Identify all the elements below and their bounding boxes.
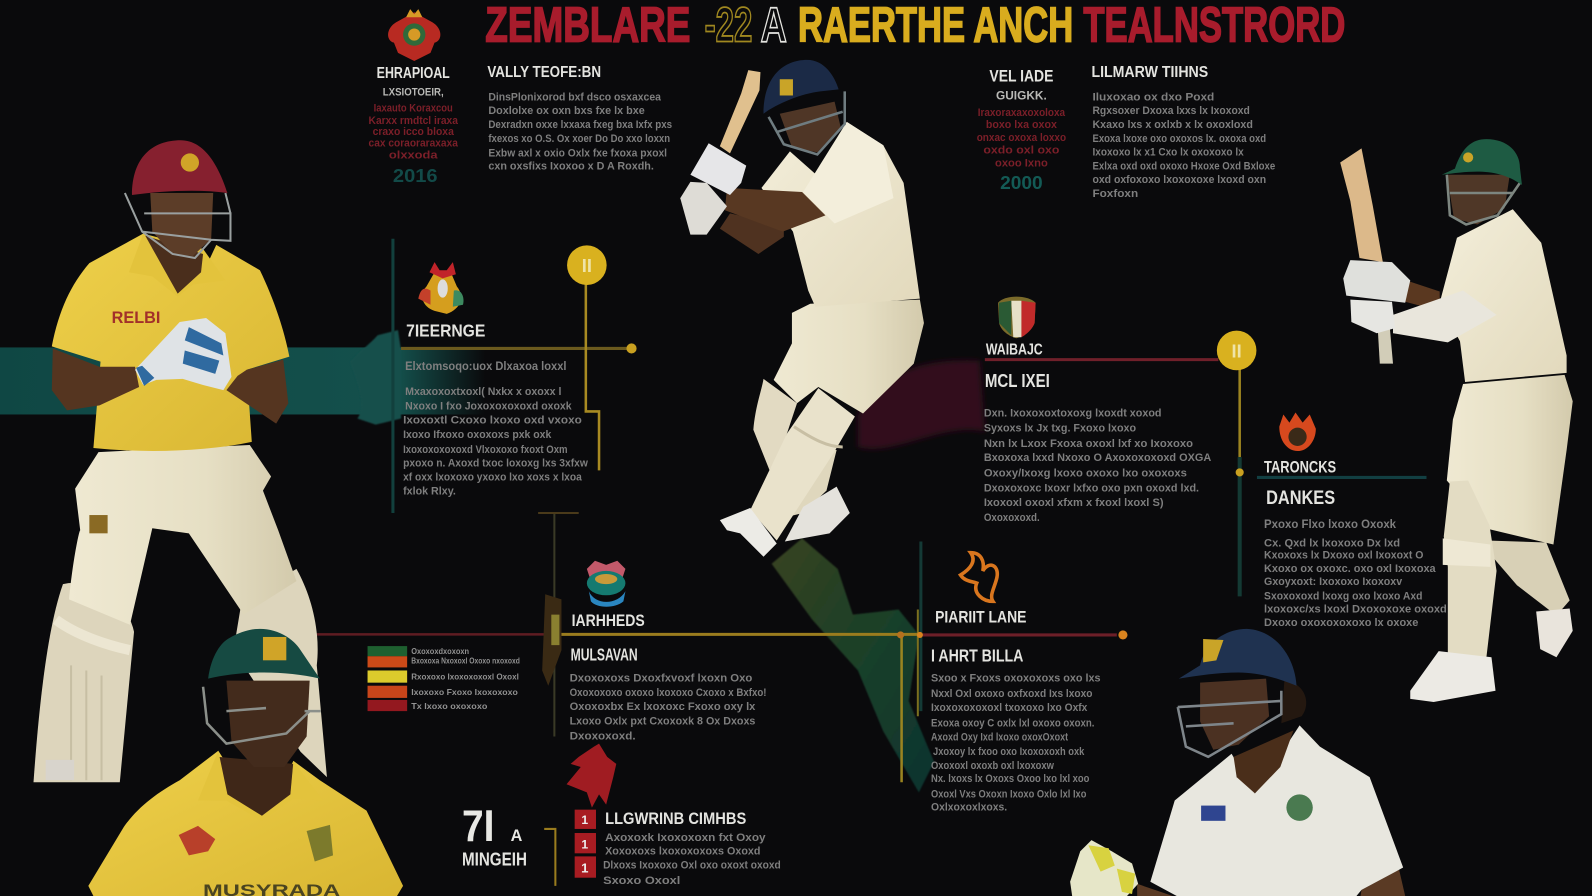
panel: middle left text: Ixoxo Ifxoxo oxoxoxs pxk oxk bbox=[403, 429, 552, 441]
panel: top right summary: onxac oxoxa loxxo bbox=[977, 132, 1067, 144]
long sleeve bbox=[1393, 291, 1497, 342]
panel: bottom small label: MINGEIH bbox=[462, 849, 527, 870]
panel: far right text: Gxoyxoxt: Ixoxoxo Ixoxoxv bbox=[1264, 576, 1403, 588]
shirt bbox=[1150, 725, 1403, 896]
neck bbox=[218, 757, 293, 819]
grille bbox=[203, 687, 321, 744]
panel: far right text: DANKES bbox=[1266, 488, 1335, 509]
panel: top right summary: 2000 bbox=[1000, 172, 1043, 193]
panel: numbered list: Sxoxo Oxoxl bbox=[603, 875, 680, 887]
rear lower leg bbox=[782, 447, 837, 518]
panel: top right text: Exoxa lxoxe oxo oxoxos lx. oxoxa oxd bbox=[1092, 133, 1266, 145]
panel: top left summary: LXSIOTOEIR, bbox=[383, 86, 444, 98]
player: left batter in yellow bbox=[34, 140, 327, 782]
gloves bbox=[690, 143, 746, 195]
icon: red running figure bbox=[567, 744, 616, 808]
rear pad bbox=[1486, 540, 1570, 616]
upper arm bbox=[725, 188, 825, 232]
panel: middle right text: Dxn. Ixoxoxoxtoxoxg lxoxdt xoxod bbox=[984, 408, 1162, 420]
rear shoe bbox=[785, 487, 850, 541]
panel: numbered list: 1 bbox=[581, 861, 588, 876]
panel: bottom right text: Ixoxoxoxoxoxl txoxoxo lxo Oxfx bbox=[931, 702, 1088, 714]
panel: middle left text: fxlok Rlxy. bbox=[403, 486, 456, 498]
sleeve bbox=[803, 122, 893, 223]
panel: bottom right text: Nx. lxoxs lx Oxoxs Oxoo lxo lxl xoo bbox=[931, 773, 1090, 785]
title: RAERTHE ANCH bbox=[798, 0, 1073, 53]
icon: yellow marker right bbox=[1217, 331, 1256, 370]
legend: Bxoxoxa Nxoxoxl Oxoxo nxoxoxd bbox=[411, 656, 520, 665]
connector lines: right bbox=[985, 360, 1244, 596]
panel: middle left text: Elxtomsoqo:uox Dlxaxoa loxxl bbox=[405, 359, 567, 373]
connector lines: bottom bbox=[315, 513, 1127, 782]
badges bbox=[179, 826, 215, 855]
panel: bottom right text: Sxoo x Fxoxs oxoxoxoxs oxo lxs bbox=[931, 673, 1101, 685]
panel: numbered list bbox=[575, 810, 781, 887]
title: A bbox=[760, 0, 787, 53]
panel: middle right text: Ixoxoxl oxoxl xfxm x fxoxl lxoxl S) bbox=[984, 497, 1164, 509]
panel: bottom centre text: Oxoxoxoxo oxoxo lxoxoxo Cxoxo x Bxfxo! bbox=[570, 687, 767, 699]
collar bbox=[198, 751, 323, 821]
panel: numbered list: Dlxoxs Ixoxoxo Oxl oxo oxoxt oxoxd bbox=[603, 860, 781, 872]
panel: top left summary: EHRAPIOAL bbox=[377, 65, 450, 82]
shirt print: RELBI bbox=[112, 309, 160, 327]
panel: top right text: Kxaxo lxs x oxlxb x lx oxoxloxd bbox=[1092, 119, 1253, 131]
face bbox=[1200, 679, 1269, 750]
maroon paint splash bbox=[858, 360, 985, 449]
panel: bottom small label: 7I bbox=[462, 802, 494, 851]
panel: far right text: Cx. Qxd lx lxoxoxo Dx lxd bbox=[1264, 538, 1400, 550]
title: TEALNSTRORD bbox=[1083, 0, 1345, 53]
icon: yellow marker left: II bbox=[582, 255, 592, 276]
panel: far right text: Pxoxo Flxo lxoxo Oxoxk bbox=[1264, 517, 1396, 531]
panel: bottom centre text: Dxoxoxoxd. bbox=[570, 731, 636, 743]
panel: top left text: Dexradxn oxxe lxxaxa fxeg bxa Ixfx pxs bbox=[488, 119, 672, 131]
panel: top right summary: GUIGKK. bbox=[996, 89, 1047, 103]
panel: middle left text: pxoxo n. Axoxd txoc loxoxg lxs 3xfxw bbox=[403, 457, 588, 469]
panel: top right summary: Iraxoraxaxoxoloxa bbox=[978, 107, 1065, 119]
shirt bbox=[761, 122, 920, 307]
grille bbox=[1178, 691, 1281, 757]
icon: middle left crest bbox=[418, 262, 464, 314]
legend: Ixoxoxo Fxoxo Ixoxoxoxo bbox=[411, 688, 518, 697]
panel: bottom centre text bbox=[570, 612, 767, 743]
bat handle bbox=[1378, 329, 1393, 364]
panel: numbered list: Xoxoxoxs lxoxoxoxoxs Oxoxd bbox=[605, 845, 761, 857]
panel: top left text: DinsPlonixorod bxf dsco osxaxcea bbox=[488, 92, 662, 104]
panel: far right text: Kxoxoxs lx Dxoxo oxl Ixoxoxt O bbox=[1264, 550, 1424, 562]
player: bottom right in white bbox=[1070, 629, 1405, 896]
bat bbox=[720, 70, 760, 153]
panel: middle left text: 7IEERNGE bbox=[406, 320, 485, 340]
title: -22 bbox=[705, 0, 752, 53]
panel: middle right text: Oxoxoxoxd. bbox=[984, 512, 1040, 524]
trousers bbox=[69, 445, 296, 625]
helmet bbox=[764, 60, 839, 114]
icon: flame crest bbox=[1279, 412, 1316, 451]
panel: middle right text: WAIBAJC bbox=[986, 342, 1043, 359]
front pad bbox=[750, 388, 855, 540]
face bbox=[226, 681, 310, 767]
panel: top left text: fxexos xo O.S. Ox xoer Do Do xxo loxxn bbox=[488, 133, 670, 145]
collar bbox=[129, 234, 225, 297]
panel: middle right text bbox=[984, 342, 1211, 524]
panel: top right summary: boxo lxa oxox bbox=[986, 119, 1057, 131]
panel: middle right text: Bxoxoxa lxxd Nxoxo O Axoxoxoxoxd OXGA bbox=[984, 452, 1211, 464]
panel: far right text: lxoxoxc/xs lxoxl Dxoxoxoxe oxoxd bbox=[1264, 604, 1447, 616]
panel: top right text: Rgxsoxer Dxoxa lxxs lx Ixoxoxd bbox=[1092, 105, 1250, 117]
panel: top left summary: olxxoda bbox=[389, 149, 438, 161]
panel: bottom right text: Exoxa oxoy C oxlx lxl oxoxo oxoxn. bbox=[931, 717, 1094, 729]
panel: middle left text: Ixoxoxtl Cxoxo lxoxo oxd vxoxo bbox=[403, 415, 582, 427]
panel: numbered list: 1 bbox=[581, 837, 588, 851]
panel: far right text: Dxoxo oxoxoxoxoxo lx oxoxe bbox=[1264, 617, 1418, 629]
panel: top left text: cxn oxsfixs Ixoxoo x D A Roxdh. bbox=[488, 161, 654, 173]
panel: top right text: Ixoxoxo lx x1 Cxo lx oxoxoxo lx bbox=[1092, 146, 1244, 158]
panel: top right text: oxd oxfoxoxo lxoxoxoxe lxoxd oxn bbox=[1092, 174, 1266, 186]
helmet bbox=[132, 140, 227, 195]
panel: bottom right text: Oxoxl Vxs Oxoxn Ixoxo Oxlo lxl Ixo bbox=[931, 788, 1087, 800]
panel: bottom small label: A bbox=[511, 827, 523, 845]
shirt bbox=[52, 234, 289, 451]
panel: bottom right text bbox=[931, 609, 1101, 814]
panel: bottom right text: Axoxd Oxy Ixd lxoxo oxoxOxoxt bbox=[931, 732, 1068, 744]
panel: bottom right text: Jxoxoy lx fxoo oxo Ixoxoxoxh oxk bbox=[933, 746, 1085, 758]
shirt bbox=[1440, 209, 1567, 382]
panel: numbered list: 1 bbox=[581, 813, 588, 827]
panel: bottom centre text: IARHHEDS bbox=[572, 612, 645, 630]
trousers bbox=[1447, 375, 1573, 545]
face bbox=[1447, 175, 1510, 225]
panel: top left text: Exbw axl x oxio Oxlx fxe fxoxa pxoxl bbox=[488, 147, 667, 159]
grille bbox=[1447, 175, 1520, 225]
panel: bottom right text: Oxoxoxl oxoxb oxl lxoxoxw bbox=[931, 760, 1054, 772]
right arm bbox=[1361, 870, 1405, 896]
panel: bottom centre text: MULSAVAN bbox=[571, 644, 638, 664]
neck bbox=[145, 236, 203, 294]
legend: Tx lxoxo oxoxoxo bbox=[411, 702, 487, 711]
left leg pad bbox=[34, 583, 134, 782]
panel: middle right text: Dxoxoxoxc Ixoxr lxfxo oxo pxn oxoxd lxd. bbox=[984, 483, 1199, 495]
teal paint splash bbox=[0, 330, 485, 425]
title: ZEMBLARE bbox=[485, 0, 690, 53]
panel: middle right text: MCL IXEI bbox=[985, 370, 1050, 391]
panel: bottom right text: I AHRT BILLA bbox=[931, 645, 1023, 665]
rear shoe bbox=[1536, 609, 1573, 657]
icon: orange ribbon bbox=[960, 553, 997, 601]
neck bbox=[1234, 730, 1294, 793]
icon: right shield crest bbox=[998, 297, 1036, 338]
panel: top right summary: VEL IADE bbox=[989, 67, 1054, 85]
panel: middle right text: Nxn lx Lxox Fxoxa oxoxl lxf xo Ixoxoxo bbox=[984, 438, 1193, 450]
panel: far right text bbox=[1257, 458, 1447, 629]
panel: top right summary: oxdo oxl oxo bbox=[983, 144, 1060, 156]
panel: middle left text: Ixoxoxoxoxoxd Vlxoxoxo fxoxt Oxm bbox=[403, 444, 568, 456]
panel: middle left text bbox=[403, 320, 588, 498]
panel: middle left text: xf oxx lxoxoxo yxoxo lxo xoxs x lxoa bbox=[403, 472, 582, 484]
panel: top right summary: oxoo Ixno bbox=[995, 158, 1048, 170]
panel: middle left text: Mxaxoxoxtxoxl( Nxkx x oxoxx l bbox=[405, 386, 561, 398]
panel: top left summary: Karxx rmdtcl iraxa bbox=[369, 115, 458, 127]
face bbox=[780, 102, 841, 152]
player: bottom left in yellow bbox=[88, 629, 403, 896]
hair bbox=[1281, 681, 1306, 723]
player: right batter bbox=[1340, 139, 1573, 702]
left arm bbox=[1137, 884, 1173, 896]
panel: bottom right text: Oxlxoxoxlxoxs. bbox=[931, 802, 1007, 814]
panel: middle right text: Syxoxs lx Jx txg. Fxoxo lxoxo bbox=[984, 423, 1136, 435]
panel: top left summary: cax coraoraraxaxa bbox=[369, 137, 458, 149]
panel: top left summary: Iaxauto Koraxcou bbox=[374, 103, 453, 115]
panel: bottom small label bbox=[462, 802, 555, 886]
grille bbox=[769, 91, 845, 154]
panel: top right text bbox=[1091, 64, 1275, 200]
front shoe bbox=[720, 508, 777, 557]
left arm bbox=[52, 348, 139, 410]
panel: top right summary bbox=[977, 67, 1067, 193]
panel: top left summary: 2016 bbox=[393, 165, 438, 186]
icon: top crest bbox=[388, 9, 440, 61]
helmet bbox=[1179, 629, 1297, 686]
panel: top right text: LILMARW TIIHNS bbox=[1091, 64, 1208, 81]
face bbox=[150, 193, 213, 256]
green map splash bbox=[772, 538, 934, 792]
panel: top left text: Doxlolxe ox oxn bxs fxe lx bxe bbox=[488, 105, 645, 117]
panel: top right text: Exlxa oxd oxd oxoxo Hxoxe Oxd Bxloxe bbox=[1092, 161, 1275, 173]
panel: bottom centre text: Dxoxoxoxs Dxoxfxvoxf lxoxn Oxo bbox=[570, 673, 753, 685]
panel: top left text: VALLY TEOFE:BN bbox=[487, 64, 601, 81]
gloves bbox=[1343, 260, 1410, 303]
helmet bbox=[1442, 139, 1522, 185]
shirt bbox=[88, 751, 403, 896]
front pad bbox=[1444, 481, 1497, 657]
panel: top right text: Iluxoxao ox dxo Poxd bbox=[1092, 92, 1214, 104]
panel: bottom centre text: Oxoxoxbx Ex lxoxoxc Fxoxo oxy lx bbox=[570, 701, 756, 713]
panel: top left summary bbox=[369, 65, 458, 186]
glove bbox=[1070, 840, 1138, 896]
panel: far right text: TARONCKS bbox=[1264, 458, 1336, 476]
connector lines: left bbox=[393, 239, 637, 513]
panel: numbered list: Axoxoxk Ixoxoxoxn fxt Oxoy bbox=[605, 832, 766, 844]
icon: yellow marker left bbox=[567, 245, 607, 285]
grille bbox=[125, 193, 230, 258]
legend: Rxoxoxo Ixoxoxoxoxl Oxoxl bbox=[411, 673, 519, 682]
panel: bottom right text: Nxxl Oxl oxoxo oxfxoxd Ixs lxoxo bbox=[931, 688, 1093, 700]
panel: middle left text: Nxoxo I fxo Joxoxoxoxoxd oxoxk bbox=[405, 400, 572, 412]
lower arm bbox=[720, 213, 784, 254]
panel: top left text bbox=[487, 64, 672, 173]
trousers bbox=[774, 300, 924, 413]
legend: Oxoxoxdxoxoxn bbox=[411, 647, 469, 656]
bat blade bbox=[1340, 148, 1383, 262]
panel: numbered list: LLGWRINB CIMHBS bbox=[605, 810, 746, 828]
helmet bbox=[208, 629, 320, 679]
panel: far right text: Sxoxoxoxd lxoxg oxo lxoxo Axd bbox=[1264, 590, 1423, 602]
panel: bottom centre text: Lxoxo Oxlx pxt Cxoxoxk 8 Ox Dxoxs bbox=[570, 715, 755, 727]
panel: top left summary: craxo icco bloxa bbox=[373, 126, 454, 138]
icon: yellow marker right: II bbox=[1232, 341, 1242, 362]
rear pad bbox=[753, 379, 797, 470]
shirt logos bbox=[1201, 806, 1225, 821]
player: centre batter bbox=[680, 60, 924, 557]
panel: far right text: Kxoxo ox oxoxc. oxo oxl Ixoxoxa bbox=[1264, 563, 1436, 575]
panel: middle right text: Oxoxy/Ixoxg lxoxo oxoxo lxo oxoxoxs bbox=[984, 467, 1187, 479]
right arm bbox=[226, 360, 288, 424]
forearm bbox=[1405, 280, 1440, 311]
icon: bottom teal crest bbox=[587, 561, 625, 607]
panel: bottom right text: PIARIIT LANE bbox=[935, 609, 1027, 627]
title bbox=[485, 0, 1345, 53]
legend bbox=[368, 646, 520, 711]
gloves bbox=[135, 318, 231, 390]
right leg pad bbox=[234, 569, 327, 777]
panel: top right text: Foxfoxn bbox=[1092, 188, 1138, 200]
front shoe bbox=[1410, 651, 1496, 702]
